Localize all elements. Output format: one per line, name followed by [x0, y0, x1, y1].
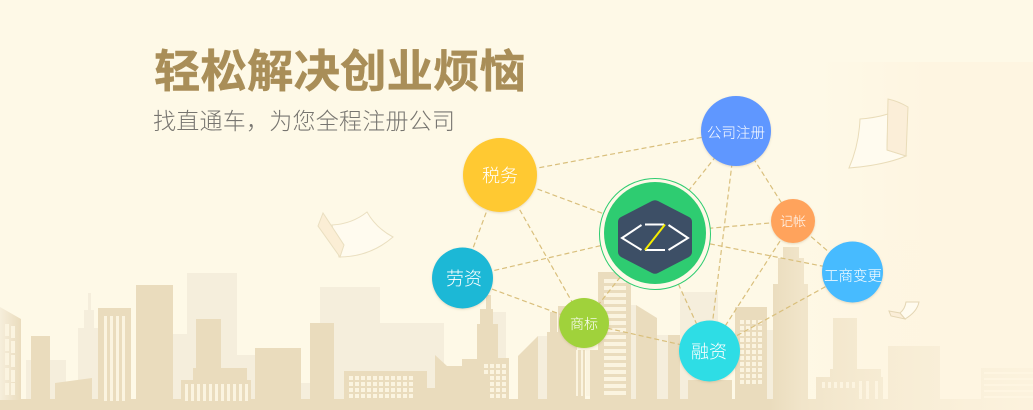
subtitle: 找直通车，为您全程注册公司 — [153, 108, 455, 134]
office windows — [349, 322, 762, 396]
light background buildings — [26, 273, 773, 400]
right skyline fade — [770, 240, 1033, 410]
node: 税务 — [463, 138, 537, 212]
paper: small right — [889, 302, 919, 319]
logo hexagon — [618, 200, 692, 274]
tower stripes — [576, 279, 1033, 399]
node: 税务: 税务 — [482, 166, 518, 186]
node: 融资 — [679, 320, 740, 382]
node: 记帐 — [771, 199, 815, 243]
node: 公司注册 — [701, 96, 771, 166]
building windows — [5, 316, 248, 401]
node: 商标: 商标 — [570, 316, 598, 332]
node: 工商变更: 工商变更 — [824, 268, 882, 285]
title: 轻松解决创业烦恼 — [154, 46, 526, 97]
node: 劳资 — [432, 248, 493, 308]
node: 记帐: 记帐 — [780, 214, 806, 229]
paper: left — [318, 212, 393, 257]
dark foreground buildings — [0, 247, 1033, 410]
paper: right — [849, 99, 908, 168]
node: 融资: 融资 — [691, 342, 727, 362]
node: 商标 — [559, 298, 609, 348]
central logo — [600, 178, 710, 290]
city skyline — [0, 240, 1033, 410]
network connecting lines — [462, 131, 852, 351]
node: 公司注册: 公司注册 — [707, 125, 765, 142]
node: 工商变更 — [822, 242, 883, 302]
logo mark — [622, 224, 688, 250]
node: 劳资: 劳资 — [446, 269, 482, 289]
